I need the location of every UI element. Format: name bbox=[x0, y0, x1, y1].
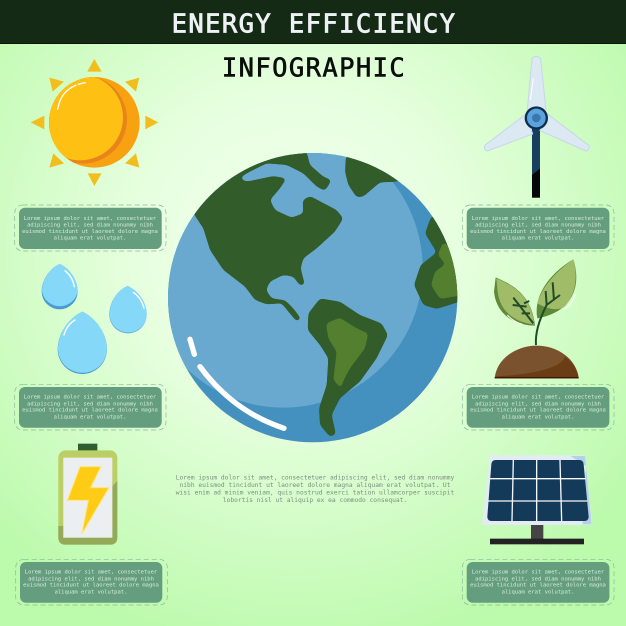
icon: battery bbox=[58, 444, 117, 545]
panel: text left 2: adipiscing elit, sed diam nonummy nibh bbox=[27, 401, 153, 407]
panel: text right 3: aliquam erat volutpat. bbox=[502, 589, 574, 595]
panel: text right 3: adipiscing elit, sed diam nonummy nibh bbox=[475, 576, 601, 582]
icon: wind turbine bbox=[484, 56, 589, 198]
panel: text left 2: Lorem ipsum dolor sit amet, consectetuer bbox=[24, 395, 157, 401]
subtitle: INFOGRAPHIC bbox=[222, 54, 406, 84]
panel: text left 3: euismod tincidunt ut laoreet dolore magna bbox=[23, 583, 159, 589]
panel: text right 1 bbox=[462, 205, 614, 251]
icon: solar panel bbox=[483, 456, 592, 544]
icon: water drops bbox=[42, 264, 147, 374]
panel: text right 2: adipiscing elit, sed diam nonummy nibh bbox=[475, 401, 601, 407]
panel: text right 1: aliquam erat volutpat. bbox=[502, 236, 574, 242]
greenland bbox=[345, 155, 400, 197]
icon: plant bbox=[494, 259, 579, 378]
south america bbox=[308, 298, 388, 437]
panel: text left 3: Lorem ipsum dolor sit amet, consectetuer bbox=[25, 570, 158, 576]
panel: text left 1: aliquam erat volutpat. bbox=[54, 236, 126, 242]
panel: text left 3: adipiscing elit, sed diam nonummy nibh bbox=[28, 576, 154, 582]
panel: text left 3 bbox=[16, 559, 167, 605]
north america bbox=[193, 152, 343, 322]
africa bbox=[414, 215, 467, 309]
panel: text left 2: aliquam erat volutpat. bbox=[54, 414, 126, 420]
panel: text left 2 bbox=[15, 384, 166, 430]
panel: text left 1: Lorem ipsum dolor sit amet, consectetuer bbox=[24, 216, 157, 222]
globe highlight bbox=[190, 339, 284, 428]
panel: text right 2: aliquam erat volutpat. bbox=[502, 414, 574, 420]
header bar bbox=[0, 0, 626, 44]
title: ENERGY EFFICIENCY bbox=[172, 10, 456, 40]
panel: text right 2 bbox=[462, 384, 614, 430]
panel: text right 1: euismod tincidunt ut laoreet dolore magna bbox=[470, 229, 606, 235]
panel: text right 3 bbox=[462, 559, 614, 605]
africa interior bbox=[431, 242, 463, 299]
panel: text right 1: Lorem ipsum dolor sit amet, consectetuer bbox=[472, 216, 605, 222]
globe bbox=[168, 153, 458, 442]
panel: text left 1: adipiscing elit, sed diam nonummy nibh bbox=[27, 223, 153, 229]
panel: text right 3: Lorem ipsum dolor sit amet, consectetuer bbox=[472, 570, 605, 576]
panel: text left 1 bbox=[15, 205, 166, 251]
panel: text right 3: euismod tincidunt ut laoreet dolore magna bbox=[470, 583, 606, 589]
panel: text right 2: euismod tincidunt ut laoreet dolore magna bbox=[470, 408, 606, 414]
center text block bbox=[176, 474, 454, 504]
center text block: wisi enim ad minim veniam, quis nostrud exerci tation ullamcorper suscipit bbox=[176, 490, 454, 496]
center text block: Lorem ipsum dolor sit amet, consectetuer adipiscing elit, sed diam nonummy bbox=[176, 474, 454, 482]
icon: sun bbox=[31, 59, 158, 186]
south america interior bbox=[326, 318, 368, 389]
panel: text left 3: aliquam erat volutpat. bbox=[55, 589, 127, 595]
center text block: lobortis nisl ut aliquip ex ea commodo consequat. bbox=[223, 497, 407, 504]
panel: text right 1: adipiscing elit, sed diam nonummy nibh bbox=[475, 223, 601, 229]
panel: text left 1: euismod tincidunt ut laoreet dolore magna bbox=[22, 229, 158, 235]
panel: text right 2: Lorem ipsum dolor sit amet, consectetuer bbox=[472, 395, 605, 401]
panel: text left 2: euismod tincidunt ut laoreet dolore magna bbox=[22, 408, 158, 414]
center text block: nibh euismod tincidunt ut laoreet dolore magna aliquam erat volutpat. Ut bbox=[180, 482, 451, 489]
